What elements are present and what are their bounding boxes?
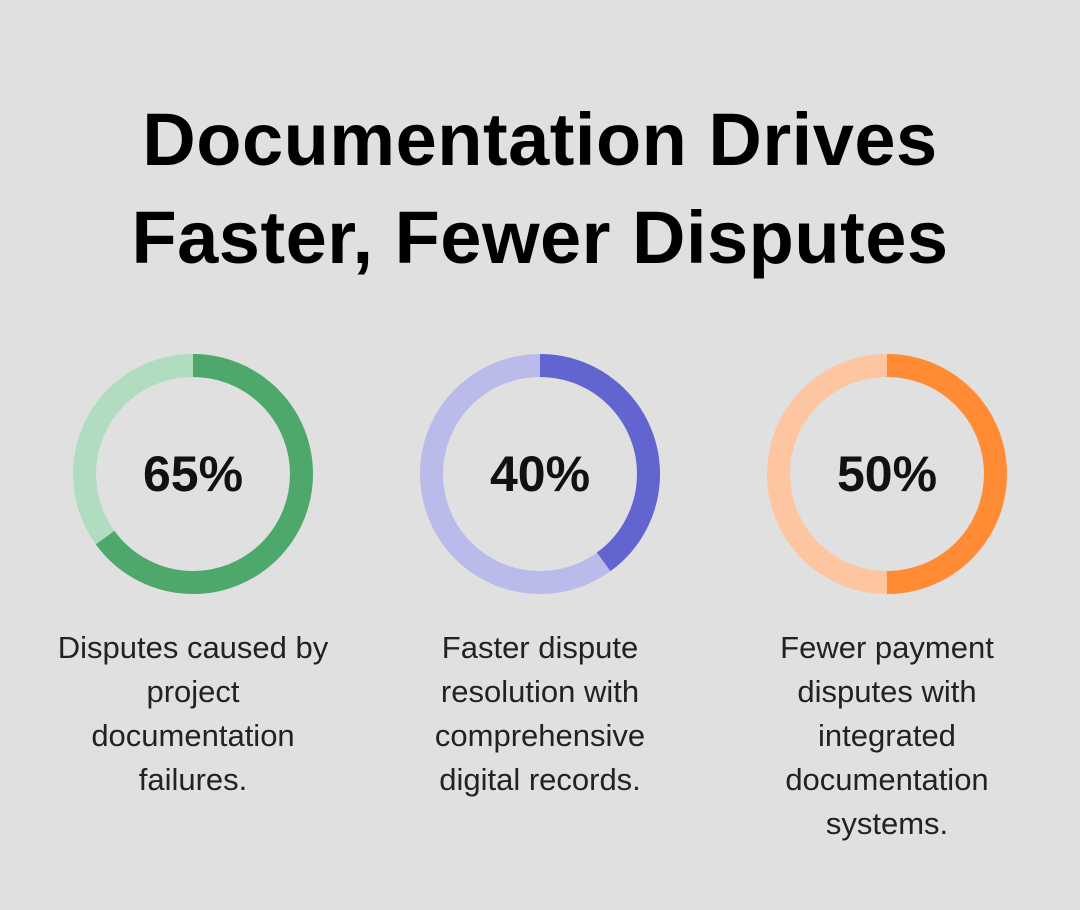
chart: 50% donut [767,354,1007,594]
title [131,98,949,279]
chart: 40% donut: 40% [490,446,590,502]
title: Documentation Drives [142,98,938,181]
text: label 3: Fewer payment disputes with integrated documentation systems. [780,630,994,841]
title: Faster, Fewer Disputes [131,196,949,279]
chart: 65% donut [73,354,313,594]
chart: 50% donut: 50% [837,446,937,502]
text: label 1: Disputes caused by project documentation failures. [58,630,328,797]
text: label 2: Faster dispute resolution with comprehensive digital records. [435,630,645,797]
chart: 65% donut: 65% [143,446,243,502]
chart: 40% donut [420,354,660,594]
